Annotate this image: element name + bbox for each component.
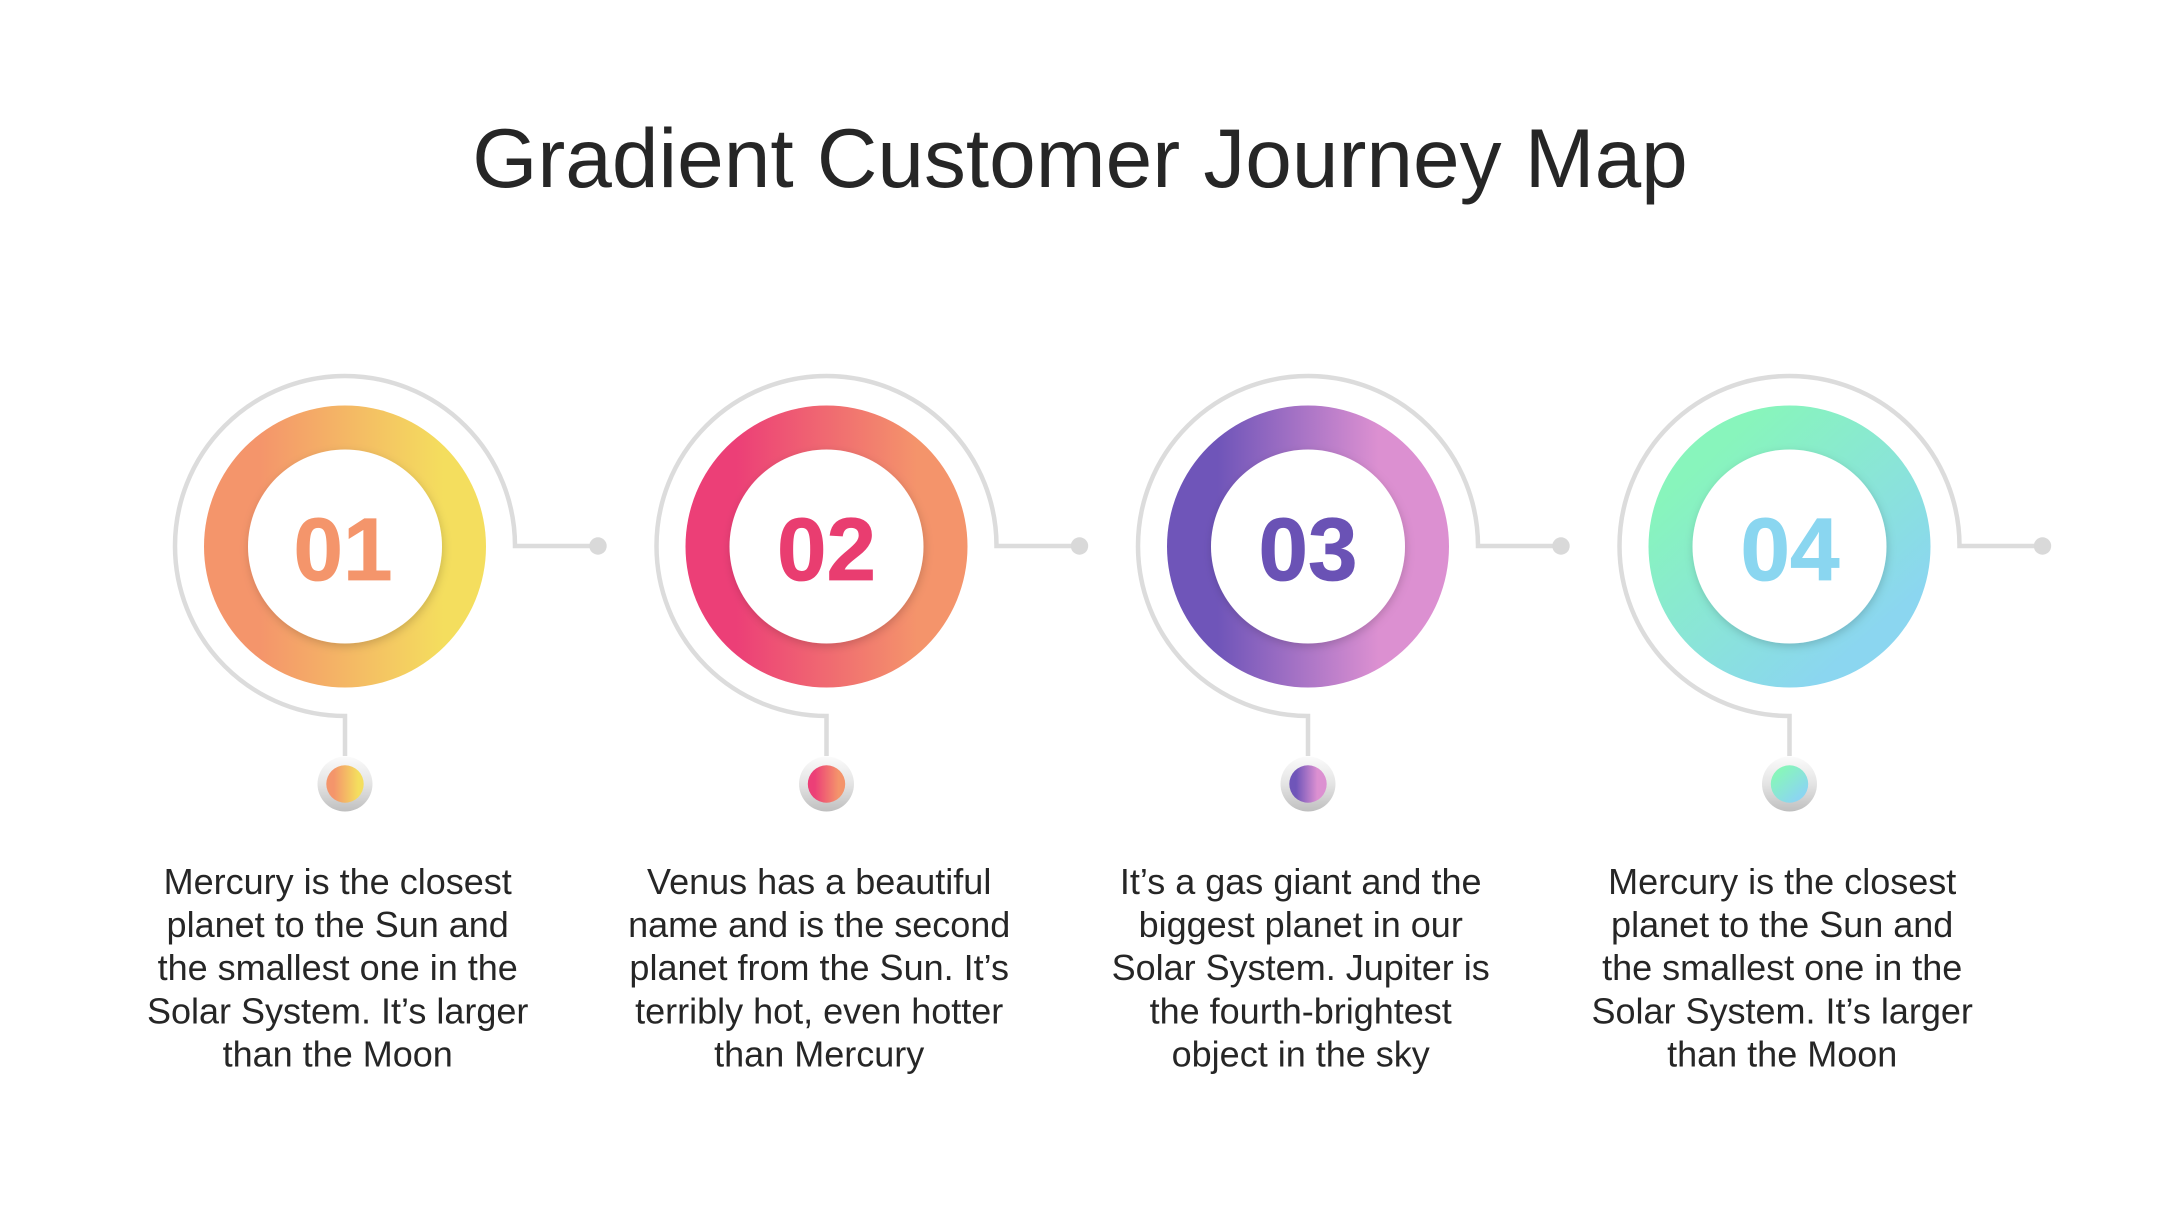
connector: arc with right and bottom leads [1138, 376, 1553, 756]
step 04 [1591, 376, 2051, 1074]
description 02: terribly hot, even hotter [635, 990, 1003, 1031]
description 02: name and is the second [628, 904, 1010, 945]
end dot [2034, 537, 2051, 555]
description 02: Venus has a beautiful [647, 861, 991, 902]
inner white disc [1692, 450, 1886, 644]
title: Gradient Customer Journey Map [472, 111, 1688, 205]
marker dot [318, 756, 372, 812]
connector: arc with right and bottom leads [657, 376, 1072, 756]
gradient ring [1167, 406, 1449, 688]
description 01: the smallest one in the [158, 947, 518, 988]
description 02: planet from the Sun. It’s [629, 947, 1009, 988]
description 03: Solar System. Jupiter is [1112, 947, 1490, 988]
marker dot [1280, 756, 1336, 812]
inner white disc [730, 450, 924, 644]
description 04: Mercury is the closest [1608, 861, 1956, 902]
inner white disc [1211, 450, 1405, 644]
description 01: planet to the Sun and [167, 904, 509, 945]
description 02: than Mercury [714, 1033, 924, 1074]
inner white disc [248, 450, 442, 644]
step 01 [147, 376, 607, 1074]
description 04: than the Moon [1667, 1033, 1897, 1074]
step 03 [1112, 376, 1570, 1074]
marker dot [1762, 756, 1817, 812]
description 01: than the Moon [223, 1033, 453, 1074]
number 03: 03 [1258, 499, 1358, 599]
end dot [589, 537, 607, 555]
description 03: It’s a gas giant and the [1120, 861, 1482, 902]
gradient ring [1648, 406, 1930, 688]
connector: arc with right and bottom leads [1620, 376, 2034, 756]
description 04: the smallest one in the [1602, 947, 1962, 988]
marker dot [799, 756, 854, 812]
gradient ring [686, 406, 968, 688]
step 02 [628, 376, 1088, 1074]
description 03: object in the sky [1172, 1033, 1430, 1074]
description 04: planet to the Sun and [1611, 904, 1953, 945]
connector: arc with right and bottom leads [175, 376, 590, 756]
description 01: Solar System. It’s larger [147, 990, 528, 1031]
description 04: Solar System. It’s larger [1591, 990, 1973, 1031]
end dot [1552, 537, 1570, 555]
end dot [1071, 537, 1088, 555]
gradient ring [204, 406, 486, 688]
description 03: the fourth-brightest [1150, 990, 1452, 1031]
number 02: 02 [777, 499, 876, 599]
number 01: 01 [294, 499, 392, 599]
description 03: biggest planet in our [1139, 904, 1463, 945]
description 01: Mercury is the closest [164, 861, 512, 902]
number 04: 04 [1740, 499, 1840, 599]
